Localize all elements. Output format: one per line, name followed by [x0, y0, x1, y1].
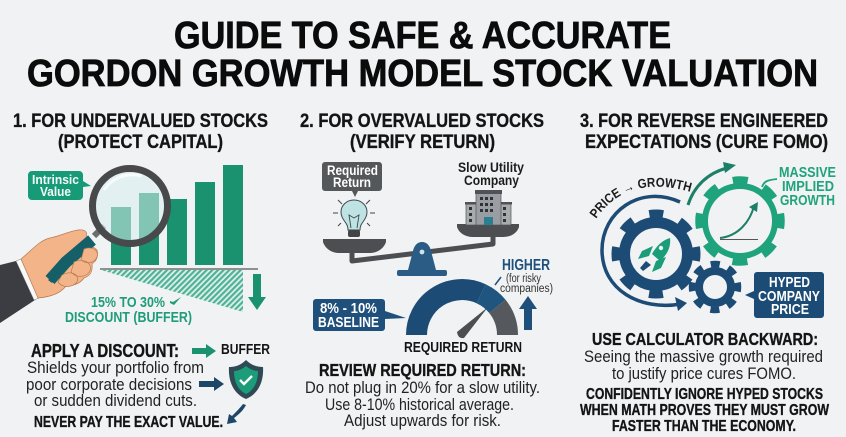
discount label [65, 294, 192, 326]
text block: return explanation [305, 379, 540, 430]
callout text: never pay: NEVER PAY THE EXACT VALUE. [34, 414, 223, 431]
panel: undervalued stocks [0, 110, 270, 431]
curved label: price to growth: PRICE → GROWTH [589, 178, 692, 218]
panel: reverse engineered expectations [580, 110, 836, 435]
callout text: confidently ignore: FASTER THAN THE ECONOMY. [612, 418, 796, 435]
discount triangle [100, 269, 258, 312]
heading: section 1: 1. FOR UNDERVALUED STOCKS [13, 110, 268, 132]
callout: intrinsic value [28, 171, 91, 200]
panel: overvalued stocks [300, 110, 553, 430]
heading: section 2: (VERIFY RETURN) [350, 131, 495, 153]
text block: calculator explanation: to justify price cures FOMO. [612, 365, 796, 383]
icon: curved arrow [227, 404, 246, 424]
callout text: confidently ignore [580, 386, 829, 435]
callout: required return: Return [333, 175, 371, 190]
icon: small blue gear [688, 260, 742, 314]
heading: section 1 [13, 110, 268, 153]
label: massive implied growth: IMPLIED [782, 178, 834, 195]
text block: discount explanation [26, 359, 204, 410]
heading: section 2: 2. FOR OVERVALUED STOCKS [300, 110, 544, 132]
callout: baseline [313, 299, 406, 331]
callout: required return: Required [327, 163, 378, 178]
heading: review required return: REVIEW REQUIRED RETURN: [319, 360, 526, 380]
icon: shield [229, 360, 263, 399]
icon: blue arrow [199, 377, 224, 391]
text block: discount explanation: poor corporate decisions [26, 376, 192, 394]
gauge chart [416, 290, 508, 335]
label: massive implied growth [762, 164, 836, 209]
icon: balance scale [323, 224, 519, 276]
label: higher [495, 257, 553, 295]
discount label: 15% TO 30% [91, 294, 165, 311]
icon: hand with magnifying glass [0, 168, 168, 323]
label: higher: (for risky [506, 273, 541, 285]
text block: discount explanation: Shields your portfolio from [27, 359, 204, 377]
icon: green arrow [192, 344, 216, 358]
callout: intrinsic value: Value [40, 185, 71, 199]
callout: hyped company price: HYPED [769, 275, 810, 291]
label: slow utility company: Company [464, 172, 519, 188]
icon: building [465, 190, 512, 225]
heading: section 2 [300, 110, 544, 153]
label: massive implied growth: MASSIVE [779, 164, 836, 181]
heading: apply a discount: APPLY A DISCOUNT: [31, 341, 179, 361]
callout: hyped company price [745, 272, 824, 318]
icon: light bulb [333, 200, 375, 237]
text block: calculator explanation [584, 348, 823, 383]
label: higher: HIGHER [502, 257, 550, 274]
title: GUIDE TO SAFE & ACCURATE [174, 15, 671, 57]
heading: section 3 [580, 110, 828, 153]
icon: down arrow [248, 274, 266, 310]
callout: baseline: BASELINE [318, 315, 379, 331]
callout: hyped company price: COMPANY [758, 289, 820, 305]
icon: up arrow [519, 296, 537, 330]
callout: required return [322, 162, 382, 197]
icon: rocket [638, 238, 670, 272]
text block: calculator explanation: Seeing the massive growth required [584, 348, 823, 366]
callout: hyped company price: PRICE [771, 302, 809, 318]
callout: baseline: 8% - 10% [320, 301, 377, 317]
text block: return explanation: Use 8-10% historical average. [325, 396, 514, 414]
icon: large blue gear with rocket [609, 207, 703, 301]
discount label: DISCOUNT (BUFFER) [65, 309, 192, 326]
heading: section 1: (PROTECT CAPITAL) [58, 131, 223, 153]
label: slow utility company [458, 159, 524, 188]
curved arrow: blue [602, 196, 687, 311]
text block: return explanation: Do not plug in 20% for a slow utility. [305, 379, 540, 397]
icon: green gear with growth curve [692, 173, 788, 269]
curved arrow: green [688, 162, 736, 205]
label: higher: companies) [500, 283, 553, 295]
gauge needle [457, 307, 488, 338]
bar chart [111, 165, 243, 265]
text block: return explanation: Adjust upwards for risk. [344, 412, 501, 430]
callout: intrinsic value: Intrinsic [32, 173, 79, 187]
label: buffer: BUFFER [221, 341, 270, 358]
label: required return: REQUIRED RETURN [404, 340, 522, 356]
title [27, 15, 818, 95]
text block: discount explanation: or sudden dividend cuts. [34, 392, 197, 410]
label: slow utility company: Slow Utility [458, 159, 524, 175]
